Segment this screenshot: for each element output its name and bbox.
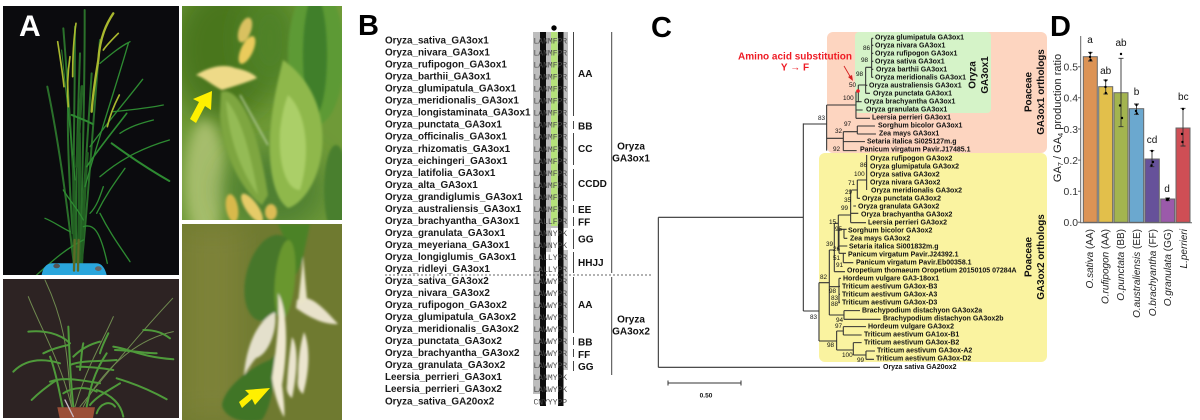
alignment column <box>533 32 568 408</box>
scale bar: 0.50 <box>700 392 713 400</box>
y-axis tick labels: 0.0 <box>1064 218 1078 229</box>
alignment column: LAWWYPR <box>534 350 567 359</box>
callout: amino acid substitution: Y → F <box>781 62 809 74</box>
species labels: GA3ox1 clade <box>860 34 971 154</box>
clade labels: AA <box>578 69 592 80</box>
y-axis title: GA <box>1052 166 1064 182</box>
rotated clade labels <box>968 49 1047 300</box>
clade labels: GA3ox1 <box>612 154 650 164</box>
species labels: GA3ox2 clade: Oropetium thomaeum Oropetium 20150105 07284A <box>847 268 1017 274</box>
data points <box>1089 52 1184 201</box>
alignment column: LAWWYPR <box>534 338 567 347</box>
clade labels: FF <box>578 218 590 228</box>
tree branches <box>658 38 881 367</box>
species labels: GA3ox2 clade: Oryza sativa GA3ox2 <box>870 172 940 178</box>
clade labels: CC <box>578 144 592 155</box>
bootstrap values: 83 <box>831 295 839 302</box>
species names: Oryza_grandiglumis_GA3ox1 <box>385 192 523 203</box>
significance letters: cd <box>1147 135 1157 146</box>
alignment column: LANMFPR <box>534 134 567 143</box>
species labels: GA3ox2 clade: Zea mays GA3ox2 <box>850 236 910 242</box>
bootstrap values: 86 <box>860 162 868 169</box>
panel A: plant and flower photographs <box>3 0 348 420</box>
species labels: GA3ox1 clade: Oryza sativa GA3ox1 <box>875 58 945 66</box>
alignment column: LANNYPK <box>534 230 567 239</box>
species labels: GA3ox2 clade: Hordeum vulgare GA3ox2 <box>868 324 954 330</box>
bootstrap values: 94 <box>836 317 844 324</box>
species names: Oryza_meyeriana_GA3ox1 <box>385 240 510 251</box>
panel D: bar chart of production ratio <box>1050 11 1192 318</box>
significance letters: d <box>1164 184 1170 195</box>
bootstrap values: 39 <box>826 241 834 248</box>
species labels: GA3ox1 clade: Leersia perrieri GA3ox1 <box>872 114 951 122</box>
significance letters: ab <box>1100 66 1112 77</box>
species names: Oryza_glumipatula_GA3ox2 <box>385 312 517 323</box>
x-axis category labels: O.sativa (AA) <box>1085 229 1096 288</box>
alignment column: LANMFPR <box>534 170 567 179</box>
species labels: GA3ox2 clade: Triticum aestivum GA3ox-A3 <box>842 292 937 298</box>
species names: Oryza_latifolia_GA3ox1 <box>385 168 496 179</box>
species names: Leersia_perrieri_GA3ox2 <box>385 384 502 395</box>
alignment column: LAWWYPR <box>534 290 567 299</box>
bootstrap values: 95 <box>835 226 843 233</box>
clade labels: BB <box>578 338 592 348</box>
photo: tall rice plant on black background <box>3 6 179 275</box>
photo: wild rice plant in pot <box>3 279 179 420</box>
species names: Oryza_granulata_GA3ox1 <box>385 228 506 239</box>
callout: amino acid substitution <box>738 52 860 93</box>
bootstrap values: 91 <box>836 262 844 269</box>
species labels: GA3ox2 clade: Setaria italica Si001832m.g <box>849 244 938 250</box>
bootstrap values: 100 <box>842 352 853 359</box>
panel B: sequence alignment <box>358 10 652 408</box>
bootstrap values: 97 <box>844 121 852 128</box>
species labels: GA3ox2 clade: Oryza brachyantha GA3ox2 <box>861 212 953 218</box>
marker: substitution site dot <box>551 25 557 31</box>
bootstrap values: 51 <box>833 255 841 262</box>
significance letters <box>1087 35 1189 195</box>
species names <box>385 36 531 408</box>
species names: Oryza_sativa_GA20ox2 <box>385 396 495 408</box>
y-axis title: production ratio <box>1052 54 1064 133</box>
clade labels: Oryza <box>617 314 645 326</box>
species labels: GA3ox1 clade: Setaria italica Si025127m.g <box>867 138 956 146</box>
alignment column: LAWWYPR <box>534 278 567 287</box>
species labels: GA3ox2 clade: Hordeum vulgare GA3-18ox1 <box>843 276 939 282</box>
species labels: GA3ox2 clade: Triticum aestivum GA3ox-D2 <box>876 356 971 362</box>
species labels: GA3ox2 clade: Triticum aestivum GA3ox-B3 <box>842 284 937 290</box>
species names: Oryza_brachyantha_GA3ox2 <box>385 348 520 359</box>
alignment column: LANMYPK <box>534 374 567 383</box>
rotated clade labels: GA3ox2 orthologs <box>1036 214 1047 300</box>
panel C: phylogenetic tree <box>651 12 1047 400</box>
species labels: GA3ox2 clade: Panicum virgatum Pavir.J24392.1 <box>848 252 959 258</box>
species names: Oryza_nivara_GA3ox2 <box>385 288 490 299</box>
x-axis category labels: O.brachyantha (FF) <box>1148 229 1159 316</box>
significance letters: b <box>1134 87 1140 98</box>
bootstrap values: 71 <box>848 180 856 187</box>
bootstrap values: 32 <box>835 128 843 135</box>
bootstrap values: 98 <box>829 288 837 295</box>
species labels: GA3ox1 clade: Zea mays GA3ox1 <box>879 130 939 138</box>
alignment column: LANMFPR <box>534 86 567 95</box>
y-axis tick labels: 0.1 <box>1064 187 1078 198</box>
species labels: GA3ox2 clade: Oryza rufipogon GA3ox2 <box>870 156 953 162</box>
alignment column: LANMFPR <box>534 110 567 119</box>
species labels: GA3ox2 clade: Brachypodium distachyon GA3ox2a <box>862 308 982 314</box>
species labels: GA3ox1 clade: Oryza meridionalis GA3ox1 <box>875 74 966 82</box>
y-axis tick labels <box>1064 62 1078 229</box>
alignment column: LANMFPR <box>534 206 567 215</box>
bootstrap values: 15 <box>829 219 837 226</box>
axes <box>1078 36 1192 223</box>
species names: Oryza_sativa_GA3ox1 <box>385 36 489 46</box>
bootstrap values: 26 <box>833 246 841 253</box>
rotated clade labels: GA3ox1 <box>980 56 991 94</box>
y-axis title: 4 <box>1056 133 1065 137</box>
rotated clade labels: Poaceae <box>1024 71 1034 112</box>
species labels: GA3ox1 clade: Oryza brachyantha GA3ox1 <box>864 98 956 106</box>
panel: Oryza GA3ox1 background <box>855 32 991 113</box>
species names: Oryza_alta_GA3ox1 <box>385 180 478 191</box>
alignment column: LANMFPR <box>534 74 567 83</box>
alignment column: LANMFPR <box>534 50 567 58</box>
species labels: GA3ox1 clade: Oryza australiensis GA3ox1 <box>869 82 962 90</box>
bootstrap values: 29 <box>845 189 853 196</box>
species names: Oryza_longiglumis_GA3ox1 <box>385 252 517 263</box>
bootstrap values: 83 <box>810 314 818 321</box>
bootstrap values: 83 <box>818 115 826 122</box>
alignment column: LANMFPR <box>534 194 567 203</box>
species names: Oryza_glumipatula_GA3ox1 <box>385 84 517 95</box>
species labels: GA3ox1 clade: Oryza barthii GA3ox1 <box>876 66 947 74</box>
bootstrap values: 92 <box>833 146 841 153</box>
species labels: GA3ox2 clade: Sorghum bicolor GA3ox2 <box>848 228 933 234</box>
species labels: GA3ox1 clade: Oryza punctata GA3ox1 <box>873 90 952 98</box>
scale bar <box>668 380 741 400</box>
species names: Oryza_officinalis_GA3ox1 <box>385 132 507 143</box>
clade labels: GA3ox2 <box>612 326 650 338</box>
clade labels: CCDD <box>578 179 607 190</box>
species names: Oryza_barthii_GA3ox1 <box>385 72 491 83</box>
species labels: GA3ox1 clade: Sorghum bicolor GA3ox1 <box>878 122 963 130</box>
alignment column: LALLFPR <box>534 218 567 227</box>
species labels: GA3ox2 clade: Triticum aestivum GA3ox-A2 <box>877 348 972 354</box>
bootstrap values: 50 <box>849 82 857 89</box>
species labels: GA3ox2 clade <box>842 156 1017 371</box>
clade labels: Oryza <box>617 142 645 152</box>
species names: Oryza_eichingeri_GA3ox1 <box>385 156 508 167</box>
alignment column: LANWYPK <box>534 386 567 395</box>
bootstrap values: 98 <box>861 57 869 64</box>
bootstrap values: 100 <box>854 171 865 178</box>
bootstrap values: 82 <box>820 274 828 281</box>
x-axis category labels: O.granulata (GG) <box>1163 229 1174 306</box>
significance letters: ab <box>1115 38 1127 49</box>
clade labels: GG <box>578 234 594 246</box>
species names: Oryza_rufipogon_GA3ox2 <box>385 300 507 311</box>
clade labels: FF <box>578 350 590 361</box>
photo: rice flower with anthers <box>182 6 342 220</box>
species names: Oryza_granulata_GA3ox2 <box>385 360 506 371</box>
species names: Oryza_ridleyi_GA3ox1 <box>385 264 490 275</box>
y-axis title: / GA <box>1052 136 1064 162</box>
clade labels: BB <box>578 122 592 132</box>
species labels: GA3ox1 clade: Oryza nivara GA3ox1 <box>875 42 946 50</box>
heading: panel letter C: C <box>651 12 672 44</box>
species names: Oryza_meridionalis_GA3ox1 <box>385 96 519 107</box>
alignment column: LALLYPR <box>534 254 567 263</box>
species labels: GA3ox2 clade: Oryza granulata GA3ox2 <box>858 204 939 210</box>
heading: panel letter B: B <box>358 10 379 42</box>
bootstrap values: 97 <box>835 323 843 330</box>
species labels: GA3ox2 clade: Oryza punctata GA3ox2 <box>862 196 941 202</box>
species labels: GA3ox2 clade: Oryza nivara GA3ox2 <box>870 180 941 186</box>
y-axis title: 7 <box>1056 162 1065 166</box>
alignment column: LAWWYPR <box>534 302 567 311</box>
bootstrap values: 99 <box>841 205 849 212</box>
rotated clade labels: Poaceae <box>1024 236 1034 277</box>
species labels: GA3ox2 clade: Panicum virgatum Pavir.Eb00358.1 <box>856 260 972 266</box>
species labels: GA3ox2 clade: Triticum aestivum GA3ox-B2 <box>864 340 959 346</box>
species labels: GA3ox2 clade: Triticum aestivum GA1ox-B1 <box>864 332 959 338</box>
y-axis tick labels: 0.3 <box>1064 125 1078 136</box>
species names: Oryza_nivara_GA3ox1 <box>385 48 490 58</box>
alignment column: CNYYYPP <box>534 398 567 408</box>
alignment column: LAWWYPR <box>534 314 567 323</box>
x-axis category labels: O.punctata (BB) <box>1116 229 1127 301</box>
bootstrap values: 98 <box>856 71 864 78</box>
error bars <box>1088 52 1186 201</box>
alignment column: LANMFPR <box>534 182 567 191</box>
bootstrap values: 99 <box>857 357 865 364</box>
species names: Oryza_punctata_GA3ox2 <box>385 336 502 347</box>
species labels: GA3ox1 clade: Oryza granulata GA3ox1 <box>866 106 947 114</box>
alignment column: LANNYPK <box>534 242 567 251</box>
bootstrap values: 86 <box>863 45 871 52</box>
arrow: yellow arrow top flower <box>190 91 212 123</box>
arrow: yellow arrow bottom flower <box>239 388 270 408</box>
bootstrap values: 98 <box>827 342 835 349</box>
bars <box>1083 57 1190 222</box>
species labels: GA3ox2 clade: Oryza meridionalis GA3ox2 <box>871 188 962 194</box>
species labels: GA3ox2 clade: Brachypodium distachyon GA3ox2b <box>883 316 1004 322</box>
panel: Poaceae GA3ox2 background <box>819 153 1047 362</box>
alignment column: LAWWYPR <box>534 326 567 335</box>
alignment column: LANMFPR <box>534 122 567 131</box>
alignment column: LANMFPR <box>534 38 567 46</box>
species names: Oryza_brachyantha_GA3ox1 <box>385 216 520 227</box>
rotated clade labels: Oryza <box>968 61 978 89</box>
species names: Oryza_rufipogon_GA3ox1 <box>385 60 507 71</box>
species names: Oryza_punctata_GA3ox1 <box>385 120 502 131</box>
clade labels: AA <box>578 300 592 311</box>
y-axis tick labels: 0.4 <box>1064 94 1078 105</box>
significance letters: a <box>1087 35 1093 46</box>
species labels: GA3ox2 clade: Leersia perrieri GA3ox2 <box>868 220 947 226</box>
species names: Oryza_sativa_GA3ox2 <box>385 276 489 287</box>
alignment column: LAWWYPR <box>534 362 567 371</box>
alignment column: LANMFPR <box>534 158 567 167</box>
species names: Leersia_perrieri_GA3ox1 <box>385 372 502 383</box>
species labels: GA3ox2 clade: Triticum aestivum GA3ox-D3 <box>842 300 937 306</box>
alignment column: LANMFPR <box>534 62 567 71</box>
significance letters: bc <box>1178 92 1189 103</box>
alignment column: LALLYPR <box>534 266 567 275</box>
photo: wild rice flower with white stigma <box>182 224 342 420</box>
species labels: GA3ox1 clade: Panicum virgatum Pavir.J17485.1 <box>860 146 971 154</box>
x-axis category labels: O.australiensis (EE) <box>1132 229 1143 318</box>
panel: Poaceae GA3ox1 background <box>827 32 1047 153</box>
callout: amino acid substitution: Amino acid substitution <box>738 52 852 62</box>
clade labels <box>578 69 650 373</box>
heading: panel letter D: D <box>1050 11 1071 43</box>
species names: Oryza_rhizomatis_GA3ox1 <box>385 144 511 155</box>
species labels: GA3ox2 clade: Oryza sativa GA20ox2 <box>883 364 957 371</box>
bootstrap values: 100 <box>843 95 854 102</box>
x-axis category labels <box>1085 228 1190 318</box>
bootstrap values <box>810 45 871 364</box>
bootstrap values: 88 <box>831 301 839 308</box>
y-axis tick labels: 0.2 <box>1064 156 1078 167</box>
clade labels: GG <box>578 362 594 373</box>
bootstrap values: 35 <box>844 197 852 204</box>
alignment column: LANMFPR <box>534 146 567 155</box>
x-axis category labels: O.rufipogon (AA) <box>1100 229 1112 304</box>
species labels: GA3ox1 clade: Oryza glumipatula GA3ox1 <box>875 34 964 42</box>
x-axis category labels: L.perrieri <box>1179 228 1190 268</box>
clade labels: EE <box>578 205 592 216</box>
clade labels: HHJJ <box>578 258 604 269</box>
species names: Oryza_meridionalis_GA3ox2 <box>385 324 519 335</box>
species labels: GA3ox2 clade: Oryza glumipatula GA3ox2 <box>870 164 959 170</box>
species labels: GA3ox1 clade: Oryza rufipogon GA3ox1 <box>875 50 958 58</box>
heading: panel letter A: A <box>19 10 41 43</box>
species names: Oryza_longistaminata_GA3ox1 <box>385 108 531 119</box>
clade brackets <box>574 32 612 375</box>
rotated clade labels: GA3ox1 orthologs <box>1036 49 1047 135</box>
species names: Oryza_australiensis_GA3ox1 <box>385 204 522 215</box>
y-axis tick labels: 0.5 <box>1064 62 1078 74</box>
alignment column: LANMFPR <box>534 98 567 107</box>
